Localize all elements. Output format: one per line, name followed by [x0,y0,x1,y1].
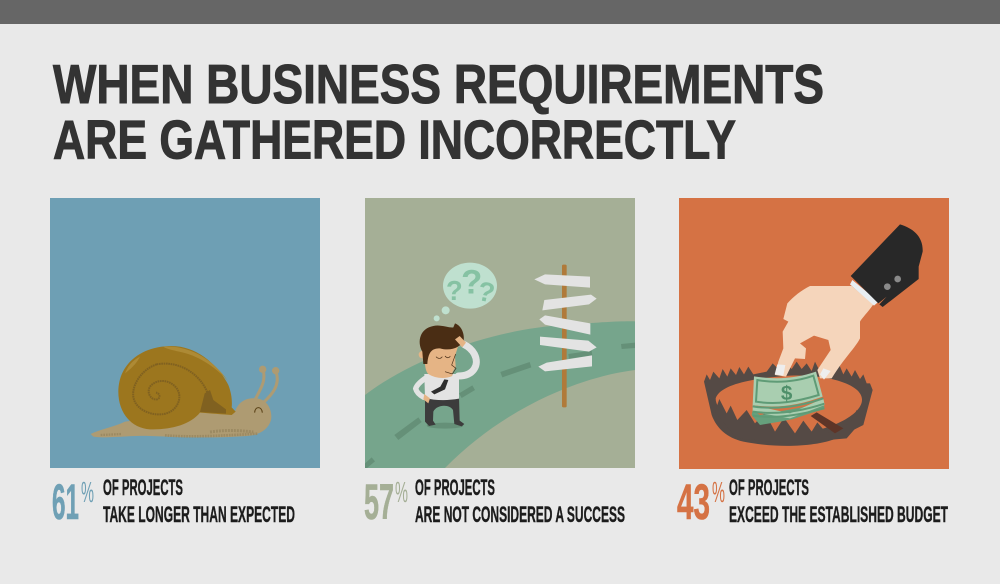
caption: 43%: 43 [677,474,710,530]
snail shell [118,346,236,429]
road dashes [365,343,635,468]
banknotes: $ [781,382,793,405]
shirt cuff [850,280,879,306]
caption: 43% [677,474,948,530]
snail body [91,398,271,437]
caption: 57%: OF PROJECTS [415,475,495,500]
caption: 57% [364,474,625,530]
title: ARE GATHERED INCORRECTLY [53,110,736,170]
panel: snail [50,198,320,468]
caption: 43%: % [712,477,725,509]
man arms [416,345,476,397]
man hair [420,323,464,364]
caption: 61%: % [81,477,94,509]
shell spiral [133,364,208,414]
man shirt body [424,374,459,400]
caption: 61%: TAKE LONGER THAN EXPECTED [103,502,295,527]
road [365,321,635,468]
top bar [0,0,1000,24]
title [53,54,824,170]
panel: crossroads [365,198,635,468]
signpost arrows [534,274,597,371]
shell highlight [125,347,228,381]
trap trigger [811,412,843,433]
jacket sleeve [851,224,923,307]
caption: 57%: 57 [364,474,394,530]
fingernails [775,364,831,380]
caption: 43%: OF PROJECTS [729,475,809,500]
thought bubble: ? [461,263,482,301]
hand [775,286,873,378]
sleeve buttons [884,283,891,290]
snail body texture [101,430,257,436]
snail antenna tips [259,366,279,374]
panel: money trap [679,198,949,469]
caption: 61% [52,474,295,530]
caption: 61%: 61 [52,474,79,530]
man hands [455,336,466,347]
signpost pole [562,265,567,407]
snail antennae [254,371,277,403]
man tie [431,379,448,394]
banknotes [752,372,825,425]
snail eye [255,408,262,413]
man [416,323,476,429]
thought bubble [434,263,498,321]
title: WHEN BUSINESS REQUIREMENTS [53,54,824,115]
shell shadow [200,390,226,414]
trap [704,362,873,446]
icon: snail [91,346,279,437]
caption: 57%: % [395,477,408,509]
caption: 57%: ARE NOT CONSIDERED A SUCCESS [415,502,625,527]
man trousers [425,397,464,426]
caption: 61%: OF PROJECTS [103,475,183,500]
man face [424,343,459,378]
thought bubble: ? [475,275,498,309]
thought bubble: ? [446,275,463,306]
